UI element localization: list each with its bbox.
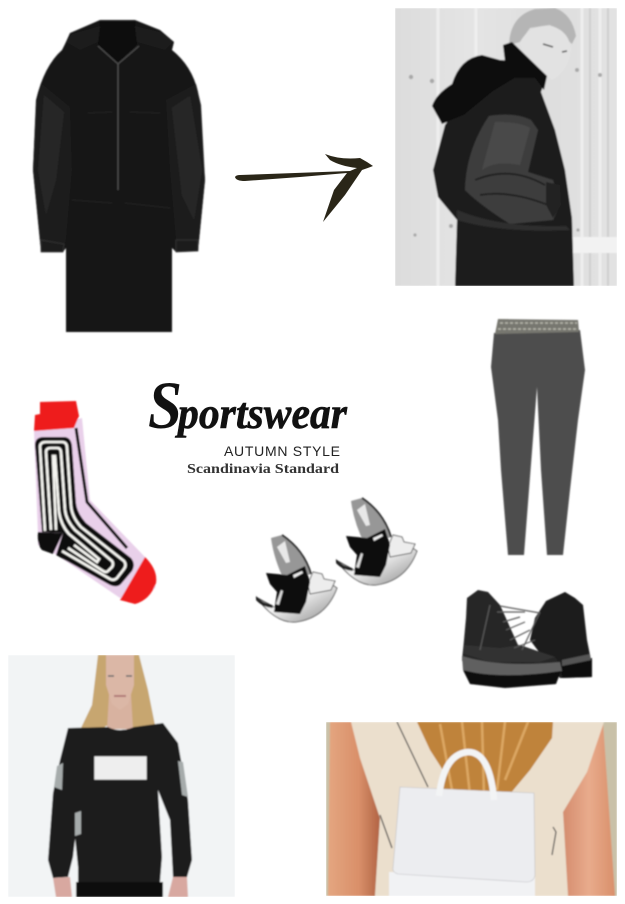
chest rectangle: [94, 756, 147, 780]
seams: [72, 112, 170, 208]
left boot sole: [462, 656, 562, 677]
earrings: [256, 498, 417, 622]
high collar: [503, 42, 547, 90]
right boot: [530, 592, 592, 678]
red cuff: [34, 401, 79, 431]
left boot: [462, 590, 562, 687]
cuffs: [41, 240, 198, 252]
hair: [509, 8, 576, 45]
trousers: [491, 319, 585, 555]
left arm: [328, 722, 380, 896]
right arm: [563, 722, 615, 896]
brand name: Scandinavia Standard: [187, 462, 339, 477]
face: [551, 26, 570, 42]
laces: [480, 605, 540, 650]
boots: [462, 590, 592, 688]
trouser legs: [491, 330, 585, 555]
spiral white stripes: [40, 442, 126, 580]
wood wall background: [395, 8, 617, 286]
black heel: [38, 532, 63, 554]
sleeve reflective patches: [54, 761, 188, 836]
zip and lapels: [98, 46, 139, 190]
satin sleeve: [465, 115, 560, 224]
socks: [34, 401, 156, 604]
title letters: portswear: [174, 389, 348, 438]
face: [105, 655, 135, 696]
photo background: [8, 655, 235, 897]
textured waistband: [495, 319, 579, 334]
title lockup: [148, 367, 348, 477]
fur collar: [66, 26, 173, 50]
bag lower body: [389, 872, 535, 896]
coat: [433, 72, 574, 286]
spiral pattern black base: [35, 437, 134, 586]
coat product image: [33, 20, 205, 332]
fur hood: [432, 55, 538, 124]
subtitle: AUTUMN STYLE: [224, 443, 340, 459]
background: [326, 722, 617, 896]
white backpack photo: [326, 722, 617, 896]
editorial model photo: [395, 8, 617, 286]
hair: [417, 722, 553, 800]
cuff at hand: [546, 182, 561, 218]
sweatshirt model photo: [8, 655, 235, 897]
trousers: [76, 882, 163, 897]
straps: [380, 722, 556, 855]
sock body: [34, 418, 156, 603]
side stripe: [76, 428, 127, 548]
red toe: [120, 557, 156, 604]
right satin sleeve: [166, 84, 205, 250]
hair: [80, 655, 156, 734]
neck: [107, 695, 133, 729]
brush arrow: [235, 154, 373, 222]
left satin sleeve: [33, 84, 72, 250]
wooden shelf: [570, 237, 617, 253]
bag handle: [439, 752, 494, 800]
left earring: [256, 535, 337, 622]
elastic waistband: [457, 210, 570, 231]
hands: [53, 877, 188, 897]
sweatshirt: [48, 723, 192, 882]
hood lining: [98, 22, 137, 62]
bag flap: [393, 787, 535, 882]
wood knots: [409, 68, 602, 237]
right earring: [336, 498, 417, 585]
title script: S: [148, 367, 182, 443]
coat body: [33, 20, 205, 332]
dress: [351, 722, 604, 896]
